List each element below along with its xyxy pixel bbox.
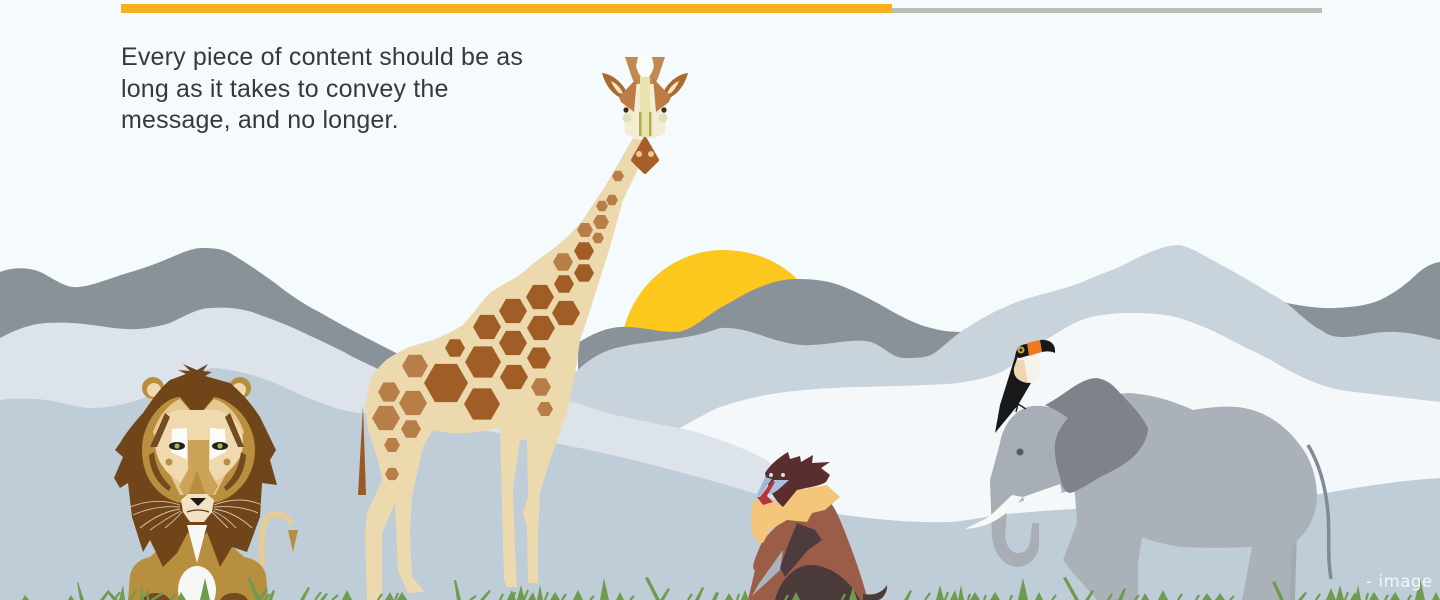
mountains: snow white band xyxy=(680,313,1440,540)
body text: long as it takes to convey the xyxy=(121,75,449,103)
mandrill beard xyxy=(751,485,840,543)
lion mane xyxy=(114,364,277,567)
mountains: light band xyxy=(0,308,820,540)
mandrill dark back and arm xyxy=(752,523,887,600)
mandrill xyxy=(748,452,887,600)
mandrill face xyxy=(757,473,789,505)
elephant head and trunk xyxy=(990,406,1075,567)
elephant tusks xyxy=(965,484,1062,529)
mountains: foreground xyxy=(0,368,1440,600)
giraffe tail xyxy=(358,405,366,495)
mountains: far dark range xyxy=(0,248,1440,400)
toucan xyxy=(995,340,1055,433)
grass xyxy=(22,577,1440,600)
body text: Every piece of content should be as xyxy=(121,43,523,71)
toucan chest xyxy=(1014,355,1040,383)
elephant body xyxy=(1060,393,1317,600)
giraffe body xyxy=(365,138,645,600)
lion body xyxy=(128,515,268,600)
elephant far legs xyxy=(1105,530,1297,600)
elephant eye xyxy=(1016,448,1024,456)
giraffe spots xyxy=(372,171,624,480)
lion xyxy=(114,364,298,600)
elephant ear xyxy=(1045,378,1148,493)
lion chest xyxy=(142,525,248,600)
sun xyxy=(623,250,797,345)
toucan head xyxy=(1015,344,1030,358)
elephant xyxy=(965,340,1331,600)
giraffe xyxy=(358,57,688,600)
lion face xyxy=(142,397,255,522)
image caption: - image xyxy=(1366,572,1433,591)
toucan body xyxy=(995,357,1031,433)
lion whiskers xyxy=(120,500,262,530)
progress bar xyxy=(121,4,1322,13)
mountains: mid grey range xyxy=(555,245,1440,440)
lion ears xyxy=(142,377,251,399)
lion tail xyxy=(262,514,298,565)
body text: message, and no longer. xyxy=(121,106,399,134)
toucan legs xyxy=(1016,404,1026,412)
toucan bill xyxy=(1027,340,1042,356)
elephant tail xyxy=(1308,445,1331,579)
mandrill head xyxy=(765,452,830,507)
giraffe head xyxy=(602,57,688,172)
mandrill body xyxy=(748,498,868,600)
